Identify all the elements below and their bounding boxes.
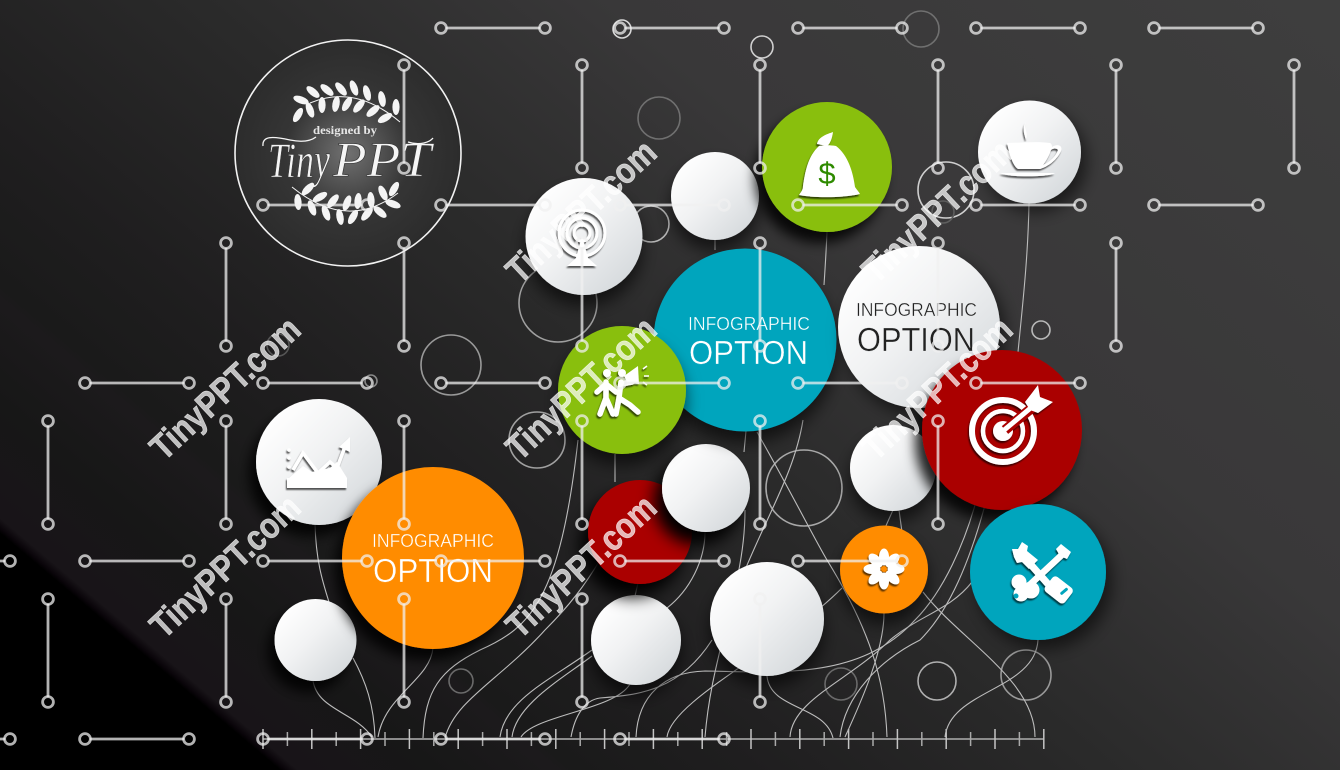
bubble: teal option [654,248,836,432]
text: orange option: INFOGRAPHIC [372,531,494,551]
icon: growth chart [287,437,350,488]
watermarks: TinyPPT.com [853,131,1020,291]
text: white option [856,300,977,358]
laurel top [291,79,400,125]
TinyPPT wordmark: PPT [332,131,435,187]
text: orange option: OPTION [373,552,493,589]
text: white option: INFOGRAPHIC [856,300,977,320]
bubble: small white top [671,152,759,240]
bubble: white over red [662,444,750,532]
icon: crossed keys [1012,542,1074,605]
designed by text: designed by [313,125,377,137]
icon: people with megaphone [597,366,649,414]
bubble: white radio [526,178,642,295]
bubble: small white bottom left [274,599,356,681]
bubble: small orange [840,526,928,614]
icon: flower [864,548,904,590]
ruler timeline [263,729,1044,749]
icon: coffee cup [1000,122,1061,176]
laurel bottom [292,180,402,226]
bubble: white beside target [850,425,936,511]
dollar sign: $ [818,156,836,191]
watermarks: TinyPPT.com [497,308,664,468]
bubble: green money [762,102,892,232]
watermarks [141,131,1020,646]
watermarks: TinyPPT.com [853,308,1020,468]
logo badge [235,40,461,266]
watermarks: TinyPPT.com [497,486,664,646]
text: teal option [688,314,810,371]
text: orange option [372,531,494,589]
bubble: white chart [256,399,382,525]
icon: radio tower [559,210,605,266]
watermarks: TinyPPT.com [497,131,664,291]
bubble: large white lower [710,562,824,676]
TinyPPT wordmark: Tiny [268,132,331,188]
watermarks: TinyPPT.com [141,486,308,646]
text: white option: OPTION [857,321,975,358]
icon: money bag [799,132,860,197]
bubble: teal keys [970,504,1106,640]
stem curves linking bubbles to the ruler [313,203,1038,738]
wordmark flourish [263,137,433,146]
watermarks: TinyPPT.com [141,308,308,468]
bubble: white option [838,246,1000,408]
bubble: red target [922,350,1082,510]
TinyPPT wordmark [268,131,435,188]
text: teal option: INFOGRAPHIC [688,314,810,334]
vertical connectors [48,70,1294,697]
icon: target with arrow [972,385,1053,462]
bubble: small red [588,480,692,584]
text: teal option: OPTION [689,334,808,371]
bubble: green megaphone [558,326,686,454]
bubble: white coffee [978,100,1081,204]
decorative outline circles [267,11,1051,700]
bubble: orange option [342,467,524,649]
bubble: white lower middle [591,595,681,685]
